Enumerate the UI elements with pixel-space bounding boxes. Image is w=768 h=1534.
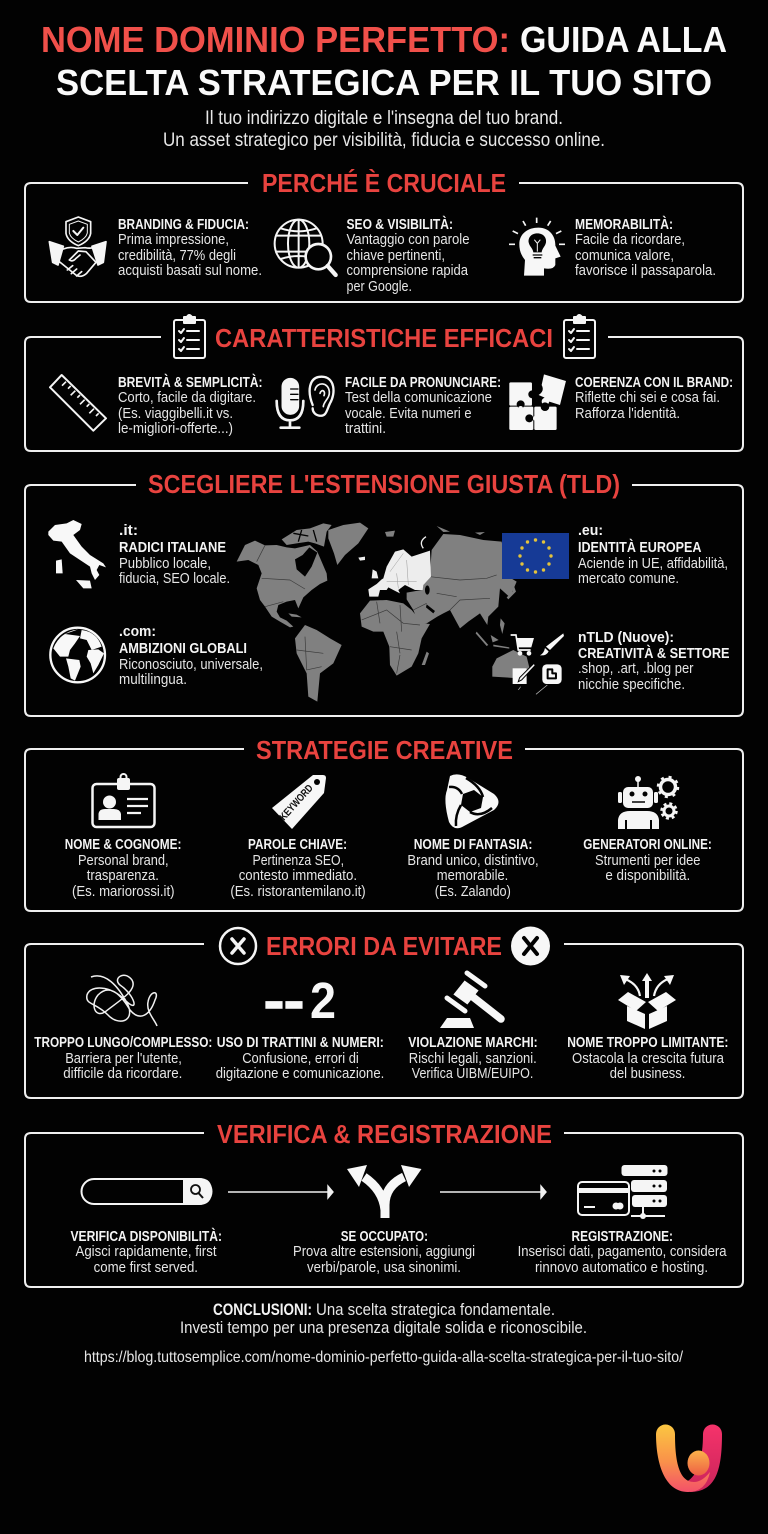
heading: verifica e registrazione: VERIFICA & REGISTRAZIONE — [217, 1119, 552, 1149]
text: generatori online: GENERATORI ONLINE: — [583, 837, 712, 853]
text: troppo lungo: TROPPO LUNGO/COMPLESSO: — [34, 1035, 212, 1051]
text: facile da pronunciare — [345, 375, 501, 437]
icon: head with light bulb — [509, 218, 565, 276]
icon: keyword tag: KEYWORD — [277, 782, 316, 823]
icon: dashes and number: -- — [264, 972, 304, 1029]
icon: earth globe — [50, 628, 105, 682]
text: .com: .com: — [119, 623, 156, 640]
text: nTLD: CREATIVITÀ & SETTORE — [578, 645, 730, 662]
text: verifica disponibilità: Agisci rapidamente, first — [76, 1243, 217, 1260]
text: seo e visibilità: comprensione rapida — [346, 262, 469, 279]
icon: outlined x circle — [220, 928, 256, 964]
text: troppo lungo: difficile da ricordare. — [63, 1065, 182, 1082]
text: memorabilità: favorisce il passaparola. — [575, 262, 716, 279]
text: .eu: IDENTITÀ EUROPEA — [578, 539, 702, 556]
icon: tangled line — [87, 975, 157, 1026]
text: registrazione: Inserisci dati, pagamento, considera — [518, 1243, 727, 1260]
icon: italy — [48, 520, 106, 588]
text: facile da pronunciare: trattini. — [345, 420, 386, 437]
text: nome e cognome: trasparenza. — [87, 867, 159, 884]
icon: open box with arrows — [618, 973, 676, 1029]
conclusions: Una scelta strategica fondamentale. — [316, 1301, 555, 1319]
text: .com: multilingua. — [119, 671, 187, 688]
text: uso di trattini: USO DI TRATTINI & NUMERI: — [217, 1035, 384, 1051]
text: registrazione: rinnovo automatico e hosting. — [535, 1259, 708, 1276]
text: seo e visibilità: Vantaggio con parole — [346, 231, 470, 248]
text: facile da pronunciare: FACILE DA PRONUNCIARE: — [345, 375, 501, 391]
text: .eu — [578, 522, 728, 587]
text: branding e fiducia: Prima impressione, — [118, 231, 229, 248]
text: nome di fantasia: memorabile. — [437, 867, 508, 884]
text: branding e fiducia: BRANDING & FIDUCIA: — [118, 217, 249, 233]
text: parole chiave: contesto immediato. — [239, 867, 357, 884]
title: SCELTA STRATEGICA PER IL TUO SITO — [56, 62, 712, 103]
text: generatori online: e disponibilità. — [605, 867, 690, 884]
text: brevità e semplicità: Corto, facile da digitare. — [118, 389, 256, 406]
text: brevità e semplicità — [118, 374, 262, 437]
icon: gavel — [440, 973, 501, 1028]
text: nome di fantasia: NOME DI FANTASIA: — [414, 837, 532, 853]
text: nome di fantasia — [407, 837, 539, 900]
text: coerenza con il brand: Riflette chi sei e cosa fai. — [575, 389, 720, 406]
text: .com: Riconosciuto, universale, — [119, 656, 263, 673]
text: se occupato: SE OCCUPATO: — [341, 1229, 428, 1245]
text: brevità e semplicità: BREVITÀ & SEMPLICITÀ: — [118, 374, 262, 391]
text: .it: .it: — [119, 522, 138, 539]
logo — [656, 1424, 722, 1492]
text: memorabilità — [575, 216, 716, 279]
text: violazione marchi — [408, 1035, 538, 1082]
text: parole chiave: (Es. ristorantemilano.it) — [230, 883, 366, 900]
text: verifica disponibilità — [70, 1228, 222, 1276]
title: NOME DOMINIO PERFETTO: — [41, 19, 510, 60]
text: nome troppo limitante: NOME TROPPO LIMITANTE: — [567, 1035, 728, 1051]
icon: dashes and number: 2 — [310, 972, 336, 1029]
conclusions — [180, 1301, 587, 1337]
icon: id badge — [92, 774, 154, 827]
text: registrazione — [518, 1229, 727, 1276]
text: coerenza con il brand — [575, 375, 733, 422]
text: se occupato: verbi/parole, usa sinonimi. — [307, 1259, 461, 1276]
text: .com — [119, 623, 263, 688]
icon: clipboard right — [564, 315, 595, 358]
text: violazione marchi: Rischi legali, sanzioni. — [409, 1050, 537, 1067]
text: se occupato: Prova altre estensioni, aggiungi — [293, 1243, 475, 1260]
title: GUIDA ALLA — [520, 19, 727, 60]
text: nome troppo limitante: Ostacola la crescita futura — [572, 1050, 725, 1067]
text: nTLD: nTLD (Nuove): — [578, 629, 674, 646]
text: branding e fiducia — [118, 217, 262, 279]
text: violazione marchi: Verifica UIBM/EUIPO. — [412, 1065, 533, 1082]
panel: caratteristiche efficaci — [25, 315, 743, 451]
text: violazione marchi: VIOLAZIONE MARCHI: — [408, 1035, 538, 1051]
text: troppo lungo — [34, 1035, 212, 1082]
icon: search bar — [82, 1178, 212, 1205]
text: brevità e semplicità: (Es. viaggibelli.it vs. — [118, 405, 233, 422]
text: seo e visibilità: per Google. — [346, 278, 412, 295]
text: nTLD: .shop, .art, .blog per — [578, 660, 694, 677]
text: uso di trattini — [216, 1035, 384, 1082]
world map — [237, 523, 530, 702]
icon: forked arrow — [347, 1165, 422, 1218]
icon: clipboard left — [174, 315, 205, 358]
text: uso di trattini: digitazione e comunicazione. — [216, 1065, 384, 1082]
text: coerenza con il brand: Rafforza l'identità. — [575, 405, 680, 422]
conclusions: CONCLUSIONI: — [213, 1301, 312, 1319]
heading: strategie creative: STRATEGIE CREATIVE — [256, 735, 513, 765]
subtitle: Un asset strategico per visibilità, fiducia e successo online. — [163, 129, 605, 151]
text: parole chiave — [230, 837, 366, 900]
text: brevità e semplicità: le-migliori-offerte...) — [118, 420, 233, 437]
panel: verifica e registrazione — [25, 1119, 743, 1287]
icon: payment card and servers — [578, 1165, 668, 1219]
icon: shield and handshake — [49, 217, 106, 276]
icon: new TLD symbols — [511, 633, 564, 694]
text: nome e cognome: Personal brand, — [78, 852, 169, 869]
text: .eu: mercato comune. — [578, 570, 679, 587]
text: generatori online — [583, 837, 712, 884]
text: generatori online: Strumenti per idee — [595, 852, 700, 869]
text: nome e cognome: NOME & COGNOME: — [65, 837, 181, 853]
source url: https://blog.tuttosemplice.com/nome-dominio-perfetto-guida-alla-scelta-strategica-per-il-tuo-sito/ — [84, 1349, 683, 1366]
text: .it — [119, 522, 230, 587]
subtitle: Il tuo indirizzo digitale e l'insegna del tuo brand. — [205, 107, 563, 129]
text: nTLD — [578, 629, 730, 693]
heading: perché è cruciale: PERCHÉ È CRUCIALE — [262, 168, 506, 198]
text: nome troppo limitante: del business. — [610, 1065, 685, 1082]
text: .it: RADICI ITALIANE — [119, 540, 226, 556]
text: uso di trattini: Confusione, errori di — [242, 1050, 359, 1067]
icon: globe with magnifier — [275, 220, 336, 275]
conclusions: Investi tempo per una presenza digitale solida e riconoscibile. — [180, 1319, 587, 1337]
text: memorabilità: comunica valore, — [575, 247, 674, 264]
text: nome troppo limitante — [567, 1035, 728, 1082]
text: verifica disponibilità: come first served. — [94, 1259, 198, 1276]
heading: errori da evitare: ERRORI DA EVITARE — [266, 931, 502, 961]
icon: robot and gears — [618, 776, 678, 829]
text: facile da pronunciare: vocale. Evita numeri e — [345, 405, 472, 422]
icon: ruler — [50, 375, 106, 431]
icon: microphone and ear — [277, 377, 334, 428]
text: .eu: Aciende in UE, affidabilità, — [578, 555, 728, 572]
text: facile da pronunciare: Test della comunicazione — [345, 389, 492, 406]
text: branding e fiducia: acquisti basati sul nome. — [118, 262, 262, 279]
heading: scegliere l'estensione giusta: SCEGLIERE L'ESTENSIONE GIUSTA (TLD) — [148, 469, 620, 499]
text: se occupato — [293, 1229, 475, 1276]
text: .eu: .eu: — [578, 522, 603, 539]
text: memorabilità: Facile da ricordare, — [575, 231, 685, 248]
text: troppo lungo: Barriera per l'utente, — [65, 1050, 182, 1067]
text: memorabilità: MEMORABILITÀ: — [575, 216, 673, 233]
text: branding e fiducia: credibilità, 77% degli — [118, 247, 236, 264]
text: .com: AMBIZIONI GLOBALI — [119, 641, 247, 657]
text: nome di fantasia: Brand unico, distintivo, — [407, 852, 539, 869]
text: parole chiave: PAROLE CHIAVE: — [248, 837, 347, 853]
text: .it: Pubblico locale, — [119, 555, 211, 572]
icon: EU flag — [502, 533, 569, 579]
arrow: to se occupato — [228, 1186, 333, 1198]
text: seo e visibilità: SEO & VISIBILITÀ: — [346, 216, 453, 233]
title — [41, 19, 727, 103]
text: seo e visibilità: chiave pertinenti, — [346, 247, 445, 264]
panel: scegliere l'estensione giusta — [25, 469, 743, 716]
icon: fantasy brand swirl — [445, 774, 498, 828]
panel: strategie creative — [25, 735, 743, 911]
text: parole chiave: Pertinenza SEO, — [252, 852, 344, 869]
text: nome e cognome: (Es. mariorossi.it) — [72, 883, 174, 900]
icon: puzzle — [509, 374, 566, 430]
text: nome e cognome — [65, 837, 181, 900]
subtitle — [163, 107, 605, 151]
text: seo e visibilità — [346, 216, 470, 295]
text: registrazione: REGISTRAZIONE: — [572, 1229, 673, 1245]
panel: perché è cruciale — [25, 168, 743, 302]
text: coerenza con il brand: COERENZA CON IL BRAND: — [575, 375, 733, 391]
heading: caratteristiche efficaci: CARATTERISTICHE EFFICACI — [215, 323, 553, 353]
text: verifica disponibilità: VERIFICA DISPONIBILITÀ: — [70, 1228, 222, 1245]
text: nome di fantasia: (Es. Zalando) — [435, 883, 511, 900]
arrow: to registrazione — [440, 1186, 546, 1198]
icon: filled x circle — [511, 926, 550, 966]
icon: dashes and number — [264, 972, 336, 1029]
text: nTLD: nicchie specifiche. — [578, 676, 685, 693]
text: .it: fiducia, SEO locale. — [119, 570, 230, 587]
panel: errori da evitare — [25, 926, 743, 1098]
